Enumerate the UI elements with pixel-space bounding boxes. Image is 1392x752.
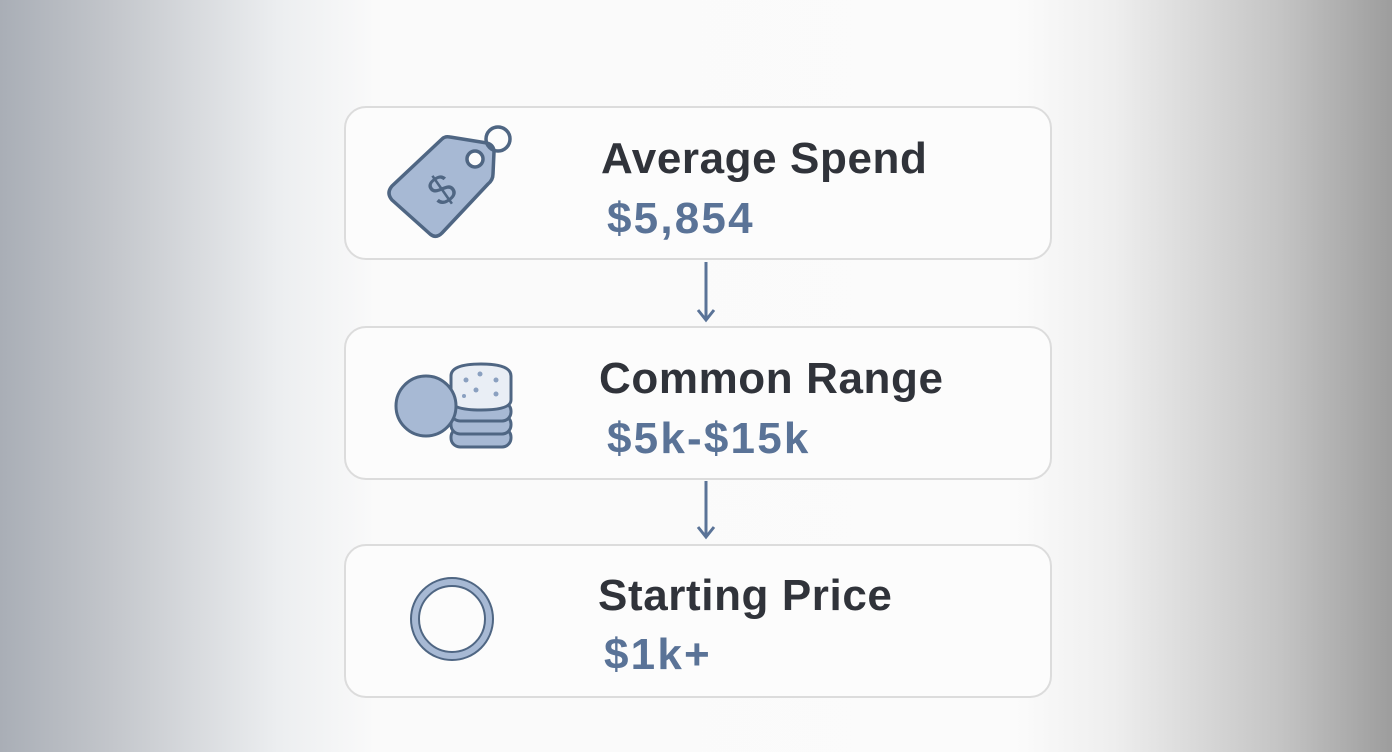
value: $5k-$15k [607, 414, 811, 463]
icon: coins [394, 362, 512, 448]
arrow 2 [696, 481, 716, 540]
title: Average Spend [601, 134, 928, 183]
value: $1k+ [604, 630, 712, 679]
value: $5,854 [607, 194, 755, 243]
card: starting price [344, 544, 1052, 698]
title: Starting Price [598, 571, 892, 620]
icon: ring [410, 577, 494, 661]
icon: price tag: $ [419, 164, 465, 216]
card: common range [344, 326, 1052, 480]
title: Common Range [599, 354, 944, 403]
card: average spend [344, 106, 1052, 260]
arrow 1 [696, 262, 716, 322]
icon: price tag [387, 125, 512, 238]
